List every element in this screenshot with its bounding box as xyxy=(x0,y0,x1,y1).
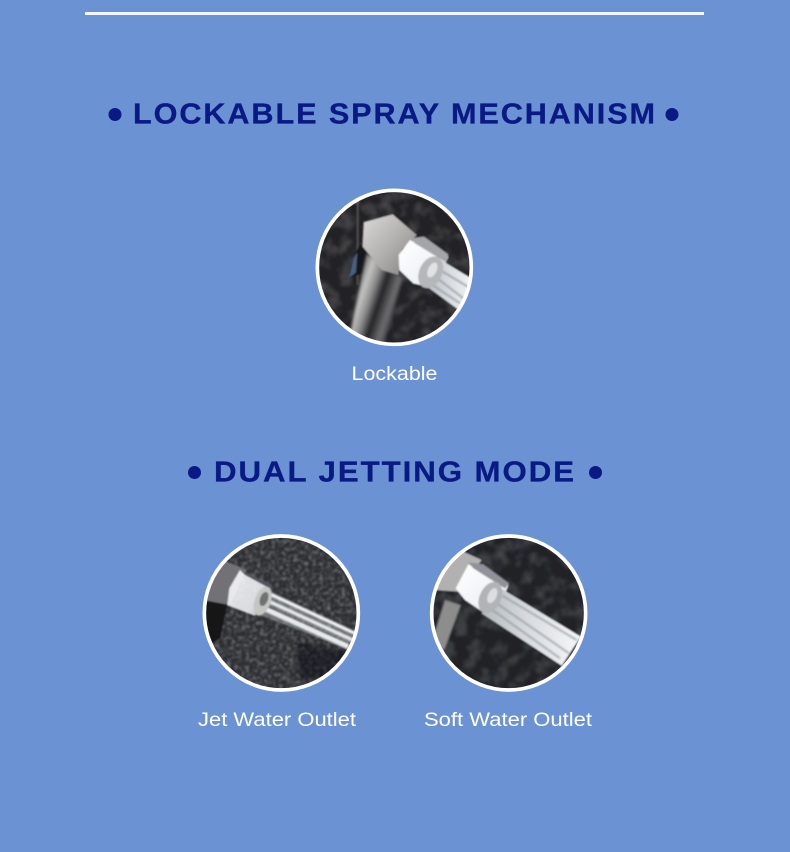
heading: lockable spray mechanism: LOCKABLE SPRAY MECHANISM xyxy=(133,98,657,130)
top divider line xyxy=(85,12,704,15)
photo: jet water outlet xyxy=(200,532,363,695)
infographic canvas xyxy=(85,12,704,726)
label: Jet Water Outlet: Jet Water Outlet xyxy=(198,709,357,731)
label: Soft Water Outlet: Soft Water Outlet xyxy=(424,709,593,731)
photo: soft water outlet xyxy=(428,532,592,695)
label: Lockable: Lockable xyxy=(352,363,438,385)
heading: dual jetting mode: DUAL JETTING MODE xyxy=(214,456,576,488)
photo: lockable spray head xyxy=(313,185,477,348)
